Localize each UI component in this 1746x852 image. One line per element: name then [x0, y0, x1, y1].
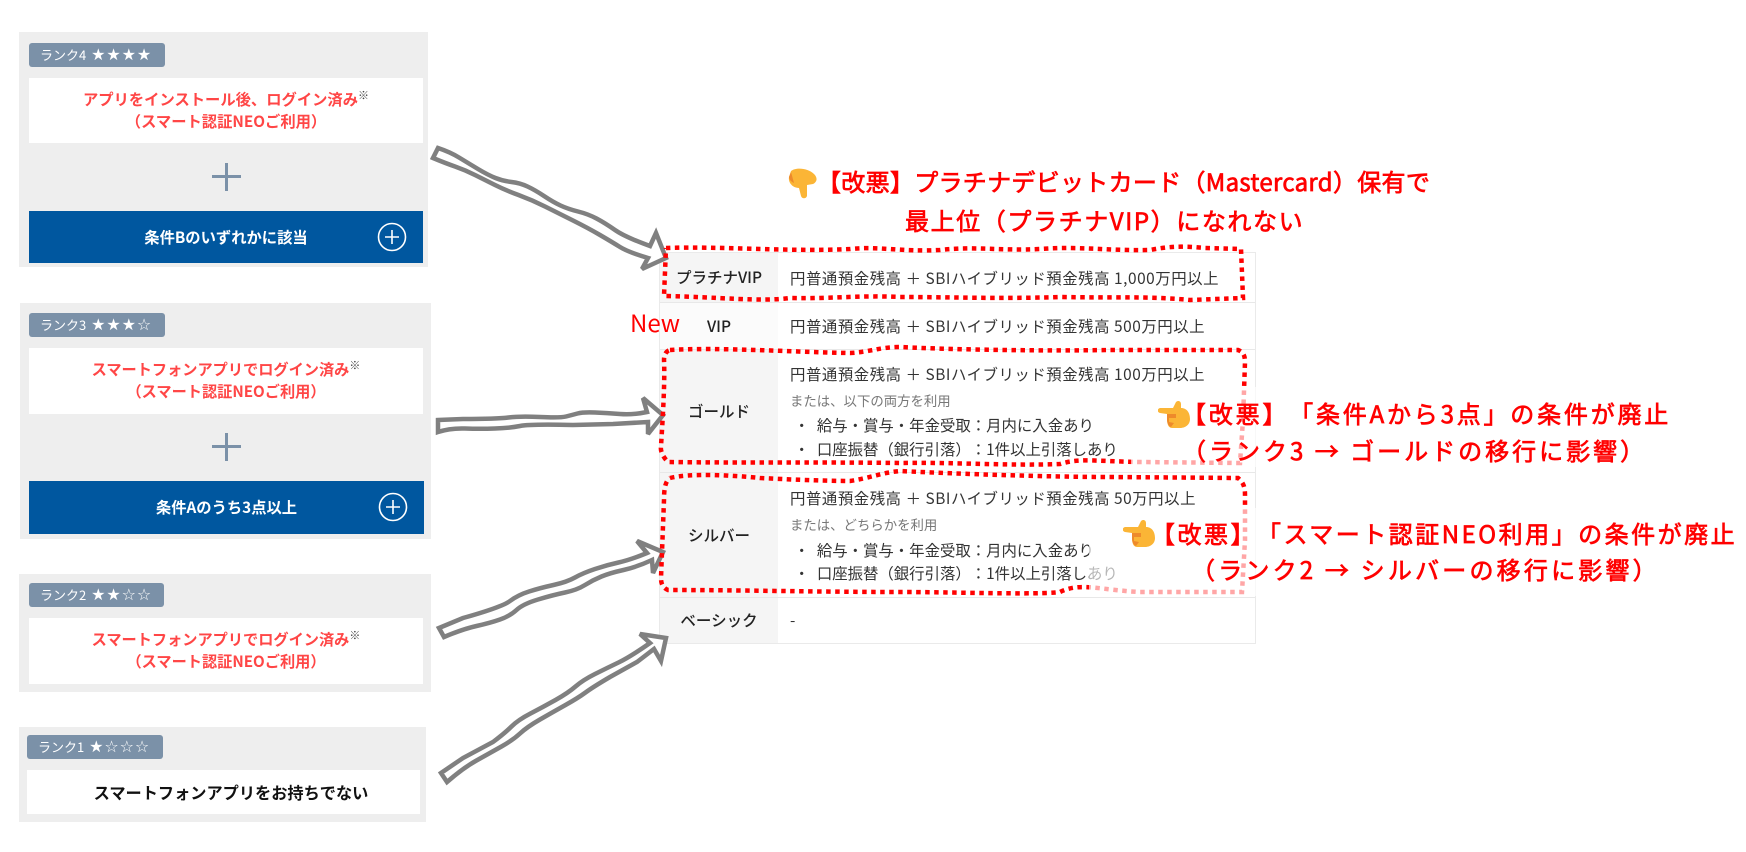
badge: rank 2	[29, 583, 164, 607]
highlight: silver row	[661, 471, 1245, 593]
icon: hand pointing left silver	[1123, 520, 1155, 547]
condition text: rank 2	[29, 618, 423, 684]
callout: condition A abolished line 2: （ランク3 → ゴールドの移行に影響）	[1182, 432, 1647, 467]
text: silver bullet 2: ・ 口座振替（銀行引落）：1件以上引落しあり	[794, 562, 1118, 584]
panel: rank 4	[19, 32, 428, 267]
highlight: platinum VIP row	[664, 247, 1243, 300]
row head: gold: ゴールド	[688, 400, 750, 422]
badge: rank 1	[27, 735, 163, 759]
callout: condition A abolished line 1: 【改悪】「条件Aから3点」の条件が廃止	[1182, 395, 1671, 430]
text: gold bullet 2: ・ 口座振替（銀行引落）：1件以上引落しあり	[794, 438, 1118, 460]
badge: rank 1: ランク1 ★☆☆☆	[38, 737, 150, 756]
badge: rank 4	[29, 43, 165, 67]
row head: platinum VIP	[660, 253, 778, 302]
row head: basic	[660, 598, 778, 643]
button: condition B: 条件Bのいずれかに該当	[144, 226, 308, 248]
condition text: rank 4: アプリをインストール後、ログイン済み※	[83, 87, 369, 110]
icon: plus	[212, 433, 241, 461]
callout: smart auth NEO abolished line 2: （ランク2 → シルバーの移行に影響）	[1191, 551, 1660, 586]
callout: platinum debit card line 2: 最上位（プラチナVIP）になれない	[905, 202, 1304, 237]
badge: rank 4: ランク4 ★★★★	[40, 45, 152, 64]
text: silver bullet 1: ・ 給与・賞与・年金受取：月内に入金あり	[794, 539, 1094, 561]
icon: hand pointing down	[788, 168, 817, 198]
condition text: rank 3: スマートフォンアプリでログイン済み※	[92, 357, 360, 380]
condition text: rank 4	[29, 78, 423, 143]
condition text: rank 1	[27, 770, 420, 814]
text: silver requirement: 円普通預金残高 ＋ SBIハイブリッド預金残高 50万円以上	[790, 487, 1196, 509]
panel: rank 2	[19, 574, 431, 692]
text: platinum VIP requirement: 円普通預金残高 ＋ SBIハイブリッド預金残高 1,000万円以上	[790, 267, 1219, 289]
row head: VIP: VIP	[707, 315, 731, 337]
icon: hand pointing left gold	[1158, 401, 1190, 428]
arrow: rank 3 to gold	[438, 398, 663, 434]
button: condition A	[29, 481, 424, 534]
icon: circled plus	[378, 492, 408, 522]
badge: rank 3: ランク3 ★★★☆	[40, 315, 152, 334]
text: gold requirement: 円普通預金残高 ＋ SBIハイブリッド預金残高 100万円以上	[790, 363, 1205, 385]
condition text: rank 2: スマートフォンアプリでログイン済み※	[92, 627, 360, 650]
row head: gold	[660, 350, 778, 472]
callout: smart auth NEO abolished line 1: 【改悪】「スマート認証NEO利用」の条件が廃止	[1151, 515, 1737, 550]
callout: platinum debit card line 1: 【改悪】プラチナデビットカード（Mastercard）保有で	[817, 163, 1430, 198]
arrow: rank 2 to silver	[439, 541, 663, 637]
panel: rank 3	[20, 303, 431, 539]
row head: VIP	[660, 303, 778, 349]
text: silver note: または、どちらかを利用	[790, 514, 937, 534]
text: gold note: または、以下の両方を利用	[790, 390, 951, 410]
condition text: rank 3	[29, 348, 423, 414]
table: rank requirements	[659, 252, 1256, 644]
text: basic requirement: -	[790, 609, 796, 631]
button: condition A: 条件Aのうち3点以上	[156, 496, 297, 518]
arrow: rank 4 to platinum VIP	[433, 148, 666, 269]
condition text: rank 4: （スマート認証NEOご利用）	[126, 110, 326, 132]
label: new: New	[630, 304, 680, 339]
row head: basic: ベーシック	[680, 609, 758, 631]
highlight: gold row	[661, 347, 1245, 465]
button: condition B	[29, 211, 423, 263]
text: gold bullet 1: ・ 給与・賞与・年金受取：月内に入金あり	[794, 414, 1094, 436]
icon: plus	[212, 163, 241, 191]
badge: rank 2: ランク2 ★★☆☆	[40, 585, 152, 604]
arrow: rank 1 to basic	[441, 634, 666, 782]
condition text: rank 2: （スマート認証NEOご利用）	[126, 650, 326, 672]
panel: rank 1	[19, 727, 426, 822]
condition text: rank 3: （スマート認証NEOご利用）	[126, 380, 326, 402]
badge: rank 3	[29, 313, 165, 337]
row head: silver: シルバー	[688, 524, 750, 546]
overlay: silver callout backdrop	[1089, 508, 1739, 596]
row head: silver	[660, 473, 778, 597]
row head: platinum VIP: プラチナVIP	[676, 266, 762, 288]
icon: circled plus	[378, 222, 406, 252]
overlay: gold callout backdrop	[1131, 387, 1681, 467]
text: VIP requirement: 円普通預金残高 ＋ SBIハイブリッド預金残高 500万円以上	[790, 315, 1205, 337]
condition text: rank 1: スマートフォンアプリをお持ちでない	[94, 780, 368, 804]
